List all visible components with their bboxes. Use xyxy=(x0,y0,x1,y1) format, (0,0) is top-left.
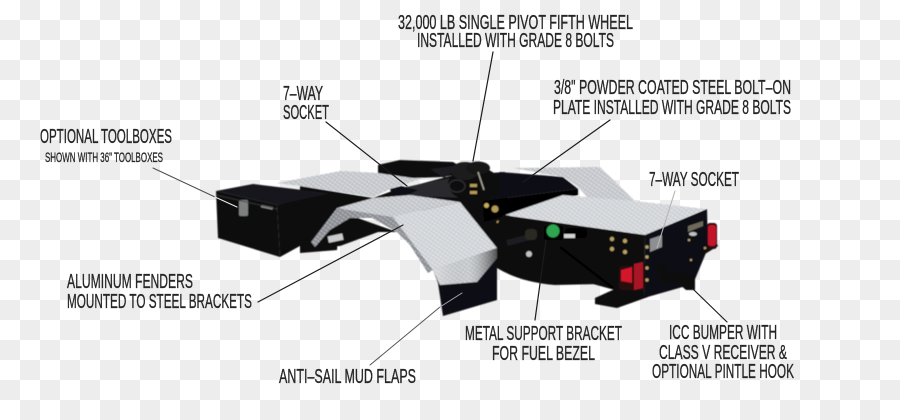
label: aluminum fenders xyxy=(67,271,252,313)
diagonal support bar xyxy=(560,247,613,288)
fuel hose right xyxy=(565,228,587,238)
label: left 7-way socket: SOCKET xyxy=(283,102,329,124)
label: left 7-way socket xyxy=(283,83,329,124)
label: optional toolboxes: OPTIONAL TOOLBOXES xyxy=(40,126,172,148)
chassis under left plate xyxy=(300,186,410,253)
side body panel xyxy=(490,215,645,298)
label: metal support bracket: METAL SUPPORT BRACKET xyxy=(465,323,622,345)
label: ICC bumper: ICC BUMPER WITH xyxy=(669,322,777,344)
leader: aluminum fenders xyxy=(258,225,403,302)
leader: mud flaps inner xyxy=(440,293,462,307)
fifth wheel assembly xyxy=(430,162,500,201)
rear body panel xyxy=(644,209,708,298)
leader: toolbox inner xyxy=(215,197,237,207)
leader: mud flaps xyxy=(370,307,440,365)
mud flap xyxy=(433,248,497,316)
rear badge xyxy=(688,221,703,232)
leader: fifth wheel xyxy=(473,52,493,161)
rear diamond plate, left xyxy=(277,171,423,197)
tail light left xyxy=(619,262,645,290)
label: fifth wheel: 32,000 LB SINGLE PIVOT FIFTH WHEEL xyxy=(398,12,633,34)
leader lines xyxy=(153,52,727,365)
7-way socket on deck xyxy=(390,186,418,195)
label: mud flaps: ANTI–SAIL MUD FLAPS xyxy=(279,366,416,388)
toolbox xyxy=(216,184,327,257)
receiver hitch xyxy=(657,263,695,290)
label: aluminum fenders: MOUNTED TO STEEL BRACKETS xyxy=(67,291,252,313)
leader: left 7-way socket xyxy=(326,122,407,186)
leader: ICC bumper xyxy=(693,289,727,322)
left chassis bracket under fender xyxy=(315,216,397,247)
label: bolt-on plate xyxy=(553,77,791,119)
rear diamond plate, right xyxy=(513,167,635,201)
illustration: fifth wheel truck bed xyxy=(216,160,718,316)
leader: optional toolboxes xyxy=(153,168,215,197)
label: fifth wheel xyxy=(398,12,633,52)
label: ICC bumper: CLASS V RECEIVER & xyxy=(659,342,787,364)
label: optional toolboxes: SHOWN WITH 36" TOOLBOXES xyxy=(45,149,163,165)
label: ICC bumper: OPTIONAL PINTLE HOOK xyxy=(652,361,794,383)
label: fifth wheel: INSTALLED WITH GRADE 8 BOLTS xyxy=(417,30,614,52)
gold bolts xyxy=(610,237,706,282)
label: metal support bracket: FOR FUEL BEZEL xyxy=(492,343,595,365)
leader: metal support bracket xyxy=(535,240,546,320)
chassis top surface xyxy=(392,178,467,198)
label: right 7-way socket: 7–WAY SOCKET xyxy=(649,169,739,191)
bolt-on steel plate xyxy=(470,172,578,231)
rear socket plate xyxy=(650,235,662,252)
leader: right 7-way socket xyxy=(657,191,675,248)
hitch bar right xyxy=(700,242,718,257)
tail light right xyxy=(707,223,717,249)
label: optional toolboxes xyxy=(40,126,172,165)
icon: green fuel cap xyxy=(544,224,563,240)
hitch bar left xyxy=(595,288,648,308)
hose and fitting xyxy=(507,237,530,243)
central chassis xyxy=(390,172,510,262)
label: ICC bumper xyxy=(652,322,794,383)
label: metal support bracket xyxy=(465,323,622,365)
leader: bolt-on plate xyxy=(523,120,610,182)
fuel tank xyxy=(497,240,600,285)
label: aluminum fenders: ALUMINUM FENDERS xyxy=(67,271,193,293)
right diamond plate top xyxy=(505,195,706,235)
labels xyxy=(40,12,794,388)
label: left 7-way socket: 7–WAY xyxy=(283,83,323,105)
upper black plate xyxy=(378,160,470,178)
fender xyxy=(311,195,497,285)
